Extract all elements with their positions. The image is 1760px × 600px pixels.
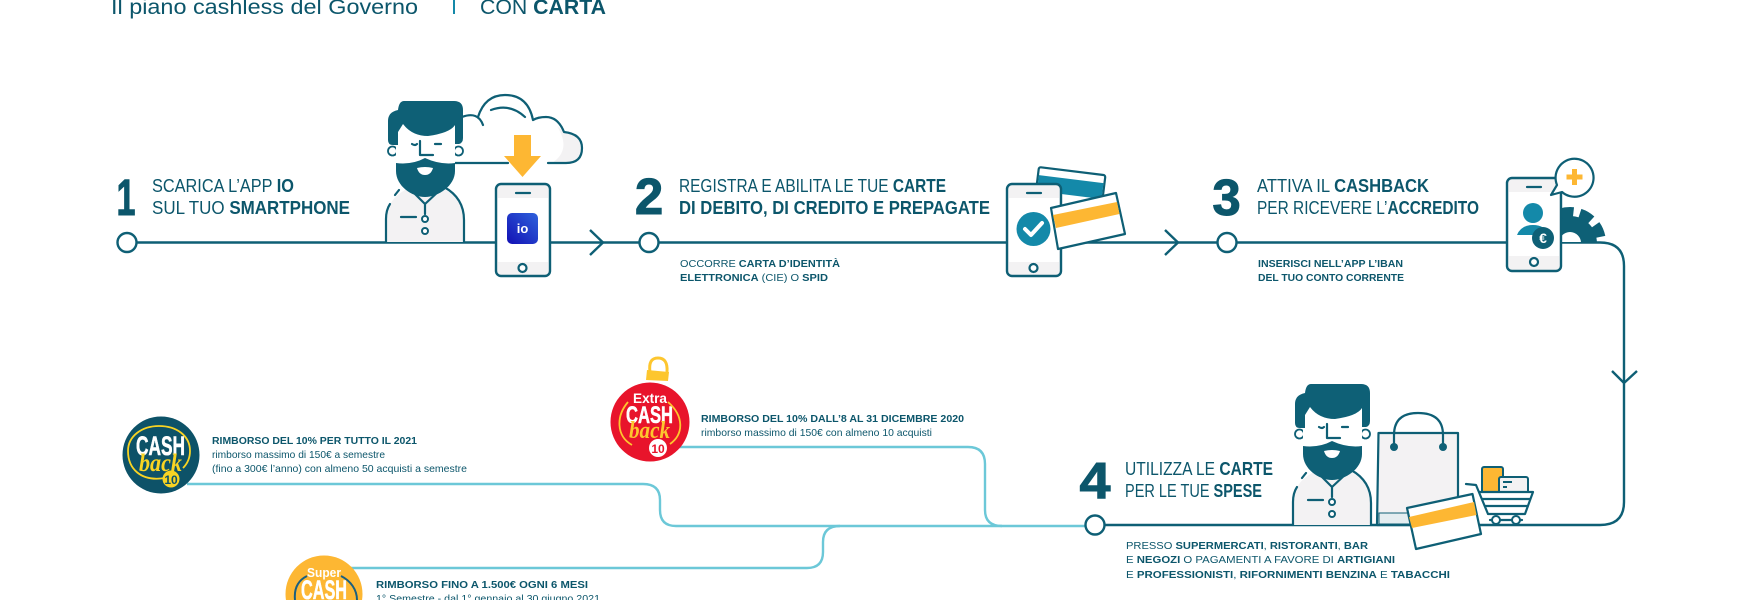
extra cashback christmas bauble: back [629,418,670,444]
extra cashback text [701,413,964,439]
step 1 [116,95,582,276]
step 2 note: OCCORRE CARTA D’IDENTITÀ [680,257,840,270]
icon: bank card [1407,494,1481,549]
arrow: down to step 4 [1612,371,1637,383]
cashback connector lines [187,447,1090,568]
main step path line [127,242,1624,525]
cashback 2021 badge: CASH [136,431,185,461]
icon: gear [1562,207,1606,242]
step 4 note: E PROFESSIONISTI , RIFORNIMENTI BENZINA E TABACCHI [1126,570,1450,581]
step 4 number: 4 [1080,452,1111,509]
cashback 2021 text: (fino a 300€ l’anno) con almeno 50 acquisti a semestre [212,463,467,475]
icon: smartphone with user and euro: € [1539,230,1547,246]
step 4 [1080,384,1533,581]
arrow: step 2 to 3 [1165,230,1178,255]
step 4 note: PRESSO SUPERMERCATI , RISTORANTI , BAR [1126,541,1369,552]
step 1 heading: SCARICA L’APP IO [152,176,294,196]
cashback 2021 badge: 10 [164,473,178,487]
step 2 heading: DI DEBITO, DI CREDITO E PREPAGATE [679,198,990,218]
extra cashback christmas bauble: Extra [633,390,667,406]
step 3 [1212,159,1601,284]
step 4 note [1126,541,1450,581]
step 4 heading [1125,459,1273,501]
step 4 note: E NEGOZI O PAGAMENTI A FAVORE DI ARTIGIANI [1126,555,1395,566]
step 1 heading: SUL TUO SMARTPHONE [152,198,350,218]
icon: front bank card [1051,193,1125,249]
extra cashback christmas bauble: CASH [626,402,673,429]
icon: smartphone with check [1007,184,1061,276]
icon: cloud [455,95,582,163]
icon: smartphone with user and euro [1507,178,1561,271]
extra cashback christmas bauble: 10 [651,442,665,456]
step 1 node [118,233,136,252]
step 2 [635,167,1125,284]
extra cashback christmas bauble [610,358,690,462]
step 3 heading: PER RICEVERE L’ACCREDITO [1257,198,1479,218]
step 3 number: 3 [1212,169,1241,226]
step 3 heading [1257,176,1479,218]
step 3 note: DEL TUO CONTO CORRENTE [1258,273,1404,284]
step 3 heading: ATTIVA IL CASHBACK [1257,176,1429,196]
step 3 node [1218,233,1236,252]
step 1 heading [152,176,350,218]
icon: smartphone with IO app [496,184,550,276]
icon: download arrow [504,135,541,177]
icon: shopping bag [1377,413,1458,525]
cashback 2021 text [212,435,467,475]
step 4 heading: PER LE TUE SPESE [1125,481,1262,501]
step 3 note [1258,259,1404,284]
icon: man with beard [1293,384,1371,525]
icon: shopping cart [1466,467,1533,524]
icon: smartphone with IO app: io [517,221,528,236]
cashback 2021 text: rimborso massimo di 150€ a semestre [212,449,385,461]
step 4 heading: UTILIZZA LE CARTE [1125,459,1273,479]
cashback 2021 badge: back [139,450,182,477]
step 2 heading: REGISTRA E ABILITA LE TUE CARTE [679,176,946,196]
cashback 2021 badge [122,416,200,494]
cashback 2021 text: RIMBORSO DEL 10% PER TUTTO IL 2021 [212,435,417,447]
arrow: step 1 to 2 [590,230,603,255]
super cashback badge [286,556,362,600]
super cashback badge: Super [307,565,341,580]
icon: man with beard [386,101,464,242]
step 2 node [640,233,658,252]
super cashback text: RIMBORSO FINO A 1.500€ OGNI 6 MESI [376,579,588,591]
icon: plus speech bubble [1551,159,1594,197]
step 2 heading [679,176,990,218]
title [111,0,606,19]
step 4 node [1086,516,1104,534]
super cashback text [376,579,600,600]
step 2 number: 2 [635,168,663,225]
step 2 note: ELETTRONICA (CIE) O SPID [680,273,828,284]
extra cashback text: RIMBORSO DEL 10% DALL’8 AL 31 DICEMBRE 2020 [701,413,964,425]
extra cashback text: rimborso massimo di 150€ con almeno 10 acquisti [701,427,932,439]
step 1 number: 1 [116,169,136,226]
step 2 note [680,257,840,284]
icon: back bank card [1034,167,1105,215]
step 3 note: INSERISCI NELL’APP L’IBAN [1258,259,1403,270]
